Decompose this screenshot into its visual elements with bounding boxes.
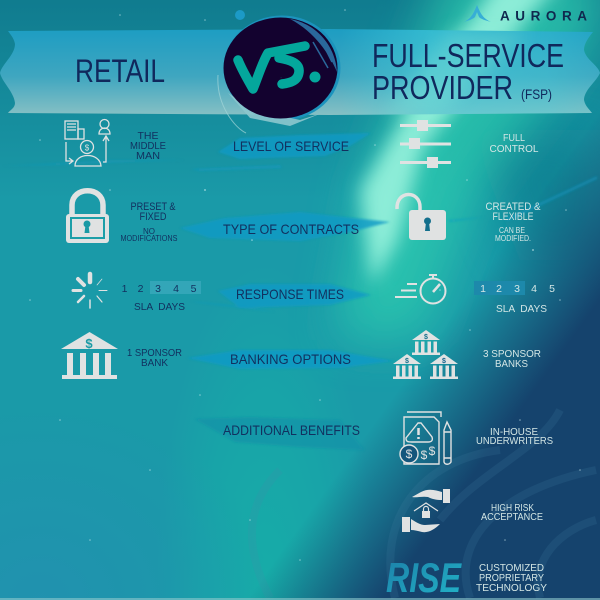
heading: Retail: RETAIL: [75, 53, 165, 89]
banner: [0, 29, 600, 115]
SLA days scale: retail: SLA DAYS: [134, 301, 185, 313]
text: preset and fixed: FIXED: [140, 211, 167, 223]
row: level of service: [65, 120, 539, 168]
text: full control: [490, 132, 539, 155]
icon: underwriter documents: $: [429, 444, 436, 458]
text: full control: CONTROL: [490, 143, 539, 155]
icon: single bank: [61, 332, 118, 379]
SLA days scale: FSP: [474, 281, 555, 315]
SLA days scale: FSP: 5: [549, 283, 555, 295]
text: customized proprietary technology: TECHNOLOGY: [476, 582, 547, 594]
row: type of contracts: [66, 191, 541, 243]
SLA days scale: retail: 5: [191, 283, 197, 295]
SLA days scale: FSP: SLA DAYS: [496, 303, 547, 315]
icon: open lock: [397, 194, 446, 240]
text: the middle man: MIDDLE: [130, 140, 166, 152]
SLA days scale: FSP: 2: [496, 283, 502, 295]
text: customized proprietary technology: CUSTOMIZED: [479, 562, 544, 574]
vs badge: [218, 10, 340, 133]
text: preset and fixed: PRESET &: [130, 201, 176, 213]
SLA days scale: FSP: 4: [531, 283, 537, 295]
text: high risk acceptance: ACCEPTANCE: [481, 511, 543, 523]
text: created and flexible: CAN BE: [499, 226, 525, 235]
SLA days scale: retail: [122, 281, 201, 313]
text: 1 sponsor bank: [127, 347, 182, 369]
text: high risk acceptance: [481, 502, 543, 523]
text: the middle man: MAN: [136, 150, 160, 162]
icon: stopwatch: [395, 275, 446, 304]
label: response times: RESPONSE TIMES: [236, 286, 344, 302]
heading: Full-Service Provider: PROVIDER: [372, 69, 513, 106]
text: preset and fixed: [120, 201, 178, 243]
icon: sliders: [400, 120, 451, 168]
icon: single bank: $: [85, 336, 93, 351]
icon: three banks: $: [424, 334, 428, 341]
streaks behind rows: [2, 133, 597, 450]
logo: Rise: RISE: [386, 554, 463, 600]
icon: middle man: [65, 120, 110, 166]
SLA days scale: retail: 3: [155, 283, 161, 295]
heading: Full-Service Provider: (FSP): [521, 86, 552, 102]
text: preset and fixed: NO: [143, 227, 155, 236]
logo: Aurora: AURORA: [500, 8, 587, 24]
label: additional benefits: ADDITIONAL BENEFITS: [223, 422, 360, 438]
row: additional benefits: [223, 412, 553, 600]
row: response times: [73, 274, 555, 315]
text: 3 sponsor banks: [483, 348, 541, 370]
icon: three banks: $: [442, 358, 446, 365]
text: high risk acceptance: HIGH RISK: [491, 502, 534, 514]
text: created and flexible: [486, 201, 541, 243]
text: in-house underwriters: UNDERWRITERS: [476, 435, 553, 447]
vs badge: VS.: [280, 77, 283, 79]
SLA days scale: retail: 1: [122, 283, 128, 295]
row: banking options: [61, 330, 541, 379]
icon: three banks: $: [405, 358, 409, 365]
text: created and flexible: CREATED &: [486, 201, 541, 213]
icon: loading spinner: [73, 274, 107, 308]
icon: middle man: $: [85, 144, 90, 152]
label: type of contracts: TYPE OF CONTRACTS: [223, 221, 359, 237]
text: 1 sponsor bank: 1 SPONSOR: [127, 347, 182, 359]
bottom edge strip: [0, 598, 600, 600]
text: customized proprietary technology: [476, 562, 547, 594]
text: in-house underwriters: [476, 426, 553, 447]
text: 1 sponsor bank: BANK: [141, 357, 168, 369]
SLA days scale: FSP: 3: [514, 283, 520, 295]
label: banking options: BANKING OPTIONS: [230, 351, 351, 367]
SLA days scale: FSP: 1: [480, 283, 486, 295]
text: 3 sponsor banks: 3 SPONSOR: [483, 348, 541, 360]
icon: closed lock: [66, 191, 109, 243]
icon: three banks: [393, 330, 458, 379]
icon: underwriter documents: $: [406, 447, 413, 461]
icon: hands with house: [402, 489, 450, 532]
text: created and flexible: MODIFIED.: [495, 234, 531, 243]
icon: underwriter documents: $: [421, 448, 428, 462]
text: customized proprietary technology: PROPRIETARY: [479, 572, 544, 584]
SLA days scale: retail: 4: [173, 283, 179, 295]
text: the middle man: THE: [138, 130, 158, 142]
text: full control: FULL: [503, 132, 525, 144]
SLA days scale: retail: 2: [138, 283, 144, 295]
icon: underwriter documents: [400, 412, 451, 464]
text: the middle man: [130, 130, 166, 162]
logo: Aurora: [464, 5, 587, 24]
text: 3 sponsor banks: BANKS: [495, 358, 528, 370]
heading: Full-Service Provider: [372, 37, 564, 106]
text: preset and fixed: MODIFICATIONS: [120, 234, 178, 243]
label: level of service: LEVEL OF SERVICE: [233, 138, 349, 154]
text: created and flexible: FLEXIBLE: [492, 211, 534, 223]
text: in-house underwriters: IN-HOUSE: [490, 426, 538, 438]
